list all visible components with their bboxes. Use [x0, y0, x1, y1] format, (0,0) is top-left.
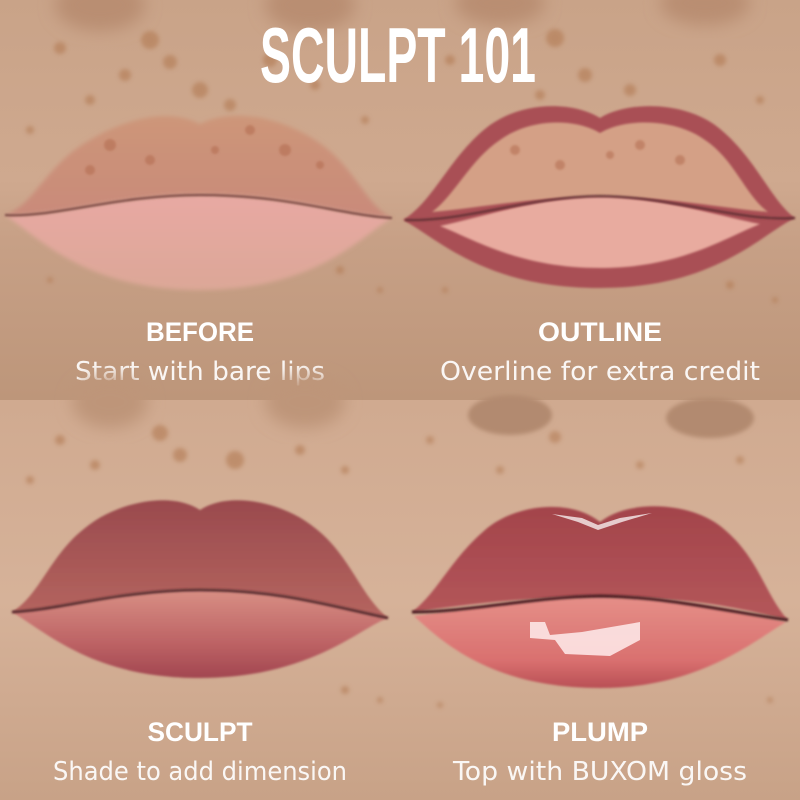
- icon: gloss highlights: [530, 513, 652, 656]
- panel: sculpt: [0, 376, 400, 800]
- heading: sculpt: SCULPT: [148, 717, 253, 747]
- caption: plump: Top with BUXOM gloss: [452, 757, 747, 787]
- heading: plump: PLUMP: [552, 717, 648, 747]
- heading: before: BEFORE: [146, 317, 254, 347]
- caption: before: Start with bare lips: [75, 357, 325, 387]
- panel: plump: [400, 395, 800, 800]
- heading: outline: OUTLINE: [538, 317, 662, 347]
- caption: outline: Overline for extra credit: [440, 357, 760, 387]
- caption: sculpt: Shade to add dimension: [53, 757, 347, 787]
- panel: outline: [400, 0, 800, 400]
- panel: before: [0, 0, 400, 400]
- title: SCULPT 101: [260, 11, 536, 99]
